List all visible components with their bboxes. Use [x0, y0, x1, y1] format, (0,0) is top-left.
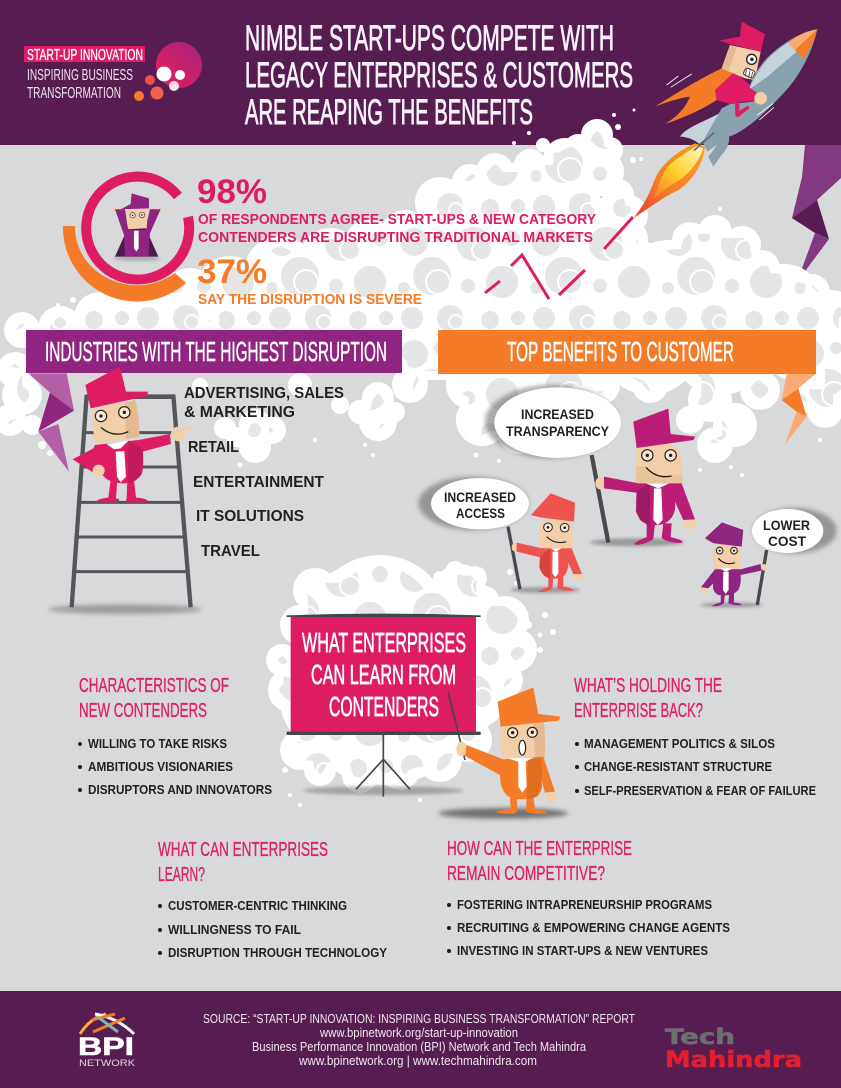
logo: start-up innovation — [24, 42, 202, 102]
logo: Tech Mahindra — [665, 1025, 802, 1073]
source text: www.bpinetwork.org/start-up-innovation — [319, 1025, 518, 1040]
industries list: & MARKETING — [184, 404, 295, 421]
icon: rocket — [680, 29, 817, 167]
ribbon: purple lightning top right — [792, 145, 841, 282]
logo: BPI network: BPI — [78, 1033, 134, 1061]
panel: how can the enterprise remain competitive — [447, 838, 730, 958]
source text: www.bpinetwork.org | www.techmahindra.com — [298, 1053, 537, 1068]
billboard heading: WHAT ENTERPRISES — [302, 627, 466, 658]
panel: how can the enterprise remain competitive: RECRUITING & EMPOWERING CHANGE AGENTS — [457, 921, 730, 935]
icon: BPI arcs — [80, 1014, 134, 1034]
stat: 98%: 98% — [197, 173, 267, 211]
logo: start-up innovation: TRANSFORMATION — [27, 85, 121, 102]
donut chart: 98% and 37% — [63, 177, 189, 302]
panel: characteristics of new contenders — [78, 675, 272, 797]
sign: increased transparency figure — [485, 385, 697, 546]
panel: characteristics of new contenders: WILLING TO TAKE RISKS — [88, 737, 227, 751]
panel: what can enterprises learn: WHAT CAN ENTERPRISES — [158, 839, 328, 861]
ladder — [72, 395, 191, 607]
panel: what can enterprises learn — [158, 839, 388, 960]
benefit labels: COST — [768, 533, 806, 549]
panel: what's holding the enterprise back: WHAT’S HOLDING THE — [574, 675, 722, 697]
logo: BPI network — [78, 1014, 135, 1068]
figure: orange presenter — [456, 687, 561, 814]
panel: what's holding the enterprise back: MANAGEMENT POLITICS & SILOS — [584, 737, 775, 751]
icon: flame — [633, 143, 705, 218]
source text: SOURCE: “START-UP INNOVATION: INSPIRING BUSINESS TRANSFORMATION” REPORT — [203, 1011, 635, 1026]
logo: start-up innovation: START-UP INNOVATION — [27, 47, 143, 64]
billboard heading: CONTENDERS — [329, 691, 439, 722]
billboard and presenter — [287, 614, 568, 819]
panel: how can the enterprise remain competitive: INVESTING IN START-UPS & NEW VENTURES — [457, 944, 708, 958]
billboard heading: CAN LEARN FROM — [311, 659, 456, 690]
logo: Tech Mahindra: Mahindra — [665, 1048, 802, 1073]
stat: 37%: SAY THE DISRUPTION IS SEVERE — [198, 291, 422, 308]
benefit labels: INCREASED — [521, 406, 594, 422]
benefit labels: LOWER — [763, 517, 810, 533]
panel: what can enterprises learn: CUSTOMER-CENTRIC THINKING — [168, 899, 347, 913]
sign: lower cost figure — [700, 508, 837, 607]
easel stand — [356, 735, 410, 797]
icon: rider hat — [719, 22, 765, 52]
source text — [203, 1011, 635, 1068]
panel: how can the enterprise remain competitive: REMAIN COMPETITIVE? — [447, 863, 605, 885]
panel: what's holding the enterprise back: SELF-PRESERVATION & FEAR OF FAILURE — [584, 784, 816, 798]
panel: what's holding the enterprise back: CHANGE-RESISTANT STRUCTURE — [584, 760, 772, 774]
icon: rider body — [715, 45, 761, 104]
billboard heading — [302, 627, 466, 722]
icon: rider cape — [655, 68, 733, 124]
figure: pink pointing — [73, 400, 193, 502]
pointer — [448, 693, 465, 760]
panel: characteristics of new contenders: NEW CONTENDERS — [79, 700, 207, 722]
ladder with figure — [48, 367, 202, 614]
panel: what's holding the enterprise back — [574, 675, 816, 798]
panel: characteristics of new contenders: AMBITIOUS VISIONARIES — [88, 760, 233, 774]
panel: how can the enterprise remain competitive: HOW CAN THE ENTERPRISE — [447, 838, 632, 860]
disruption line — [485, 217, 633, 299]
rocket with rider — [633, 22, 817, 218]
title: ARE REAPING THE BENEFITS — [245, 93, 533, 132]
panel: what can enterprises learn: WILLINGNESS TO FAIL — [168, 923, 301, 937]
ribbon: orange tail — [782, 374, 816, 444]
title — [245, 19, 633, 132]
stat: 98%: CONTENDERS ARE DISRUPTING TRADITIONAL MARKETS — [198, 229, 593, 246]
stat: 37% — [197, 253, 422, 308]
panel: what can enterprises learn: LEARN? — [158, 864, 205, 886]
panel: what can enterprises learn: DISRUPTION THROUGH TECHNOLOGY — [168, 946, 388, 960]
banner: industries: INDUSTRIES WITH THE HIGHEST DISRUPTION — [45, 336, 387, 367]
icon: rider arm and leg — [735, 87, 767, 117]
panel: what's holding the enterprise back: ENTERPRISE BACK? — [574, 700, 703, 722]
logo: start-up innovation: INSPIRING BUSINESS — [27, 67, 133, 84]
banner: industries — [26, 330, 402, 373]
logo: BPI network: NETWORK — [79, 1058, 135, 1068]
stat: 98% — [197, 173, 596, 246]
panel: how can the enterprise remain competitive: FOSTERING INTRAPRENEURSHIP PROGRAMS — [457, 898, 712, 912]
industries list: ADVERTISING, SALES — [184, 385, 344, 402]
industries list: TRAVEL — [201, 543, 260, 560]
benefit labels: INCREASED — [444, 489, 516, 505]
industries list: RETAIL — [188, 439, 239, 456]
footer band — [0, 991, 841, 1088]
industries list: IT SOLUTIONS — [196, 508, 304, 525]
logo: Tech Mahindra: Tech — [665, 1025, 735, 1049]
stat: 37%: 37% — [197, 253, 267, 291]
industries list: ENTERTAINMENT — [193, 474, 325, 491]
speed lines — [667, 74, 774, 120]
banner: benefits — [438, 330, 816, 374]
source text: Business Performance Innovation (BPI) Network and Tech Mahindra — [252, 1039, 587, 1054]
industries list — [184, 385, 344, 560]
benefit labels: ACCESS — [456, 505, 505, 521]
sign: increased access figure — [418, 477, 583, 593]
benefits figures — [418, 385, 837, 607]
stat: 98%: OF RESPONDENTS AGREE- START-UPS & NEW CATEGORY — [198, 211, 596, 228]
benefit labels — [444, 406, 810, 549]
header band — [0, 0, 841, 145]
smoke cloud backdrop — [0, 108, 841, 807]
board — [291, 617, 476, 732]
ribbon: purple tail — [28, 373, 74, 472]
panel: characteristics of new contenders: CHARACTERISTICS OF — [79, 675, 229, 697]
benefit labels: TRANSPARENCY — [506, 423, 610, 439]
hat — [85, 367, 148, 408]
icon: wizard figure — [107, 193, 167, 261]
panel: characteristics of new contenders: DISRUPTORS AND INNOVATORS — [88, 783, 272, 797]
